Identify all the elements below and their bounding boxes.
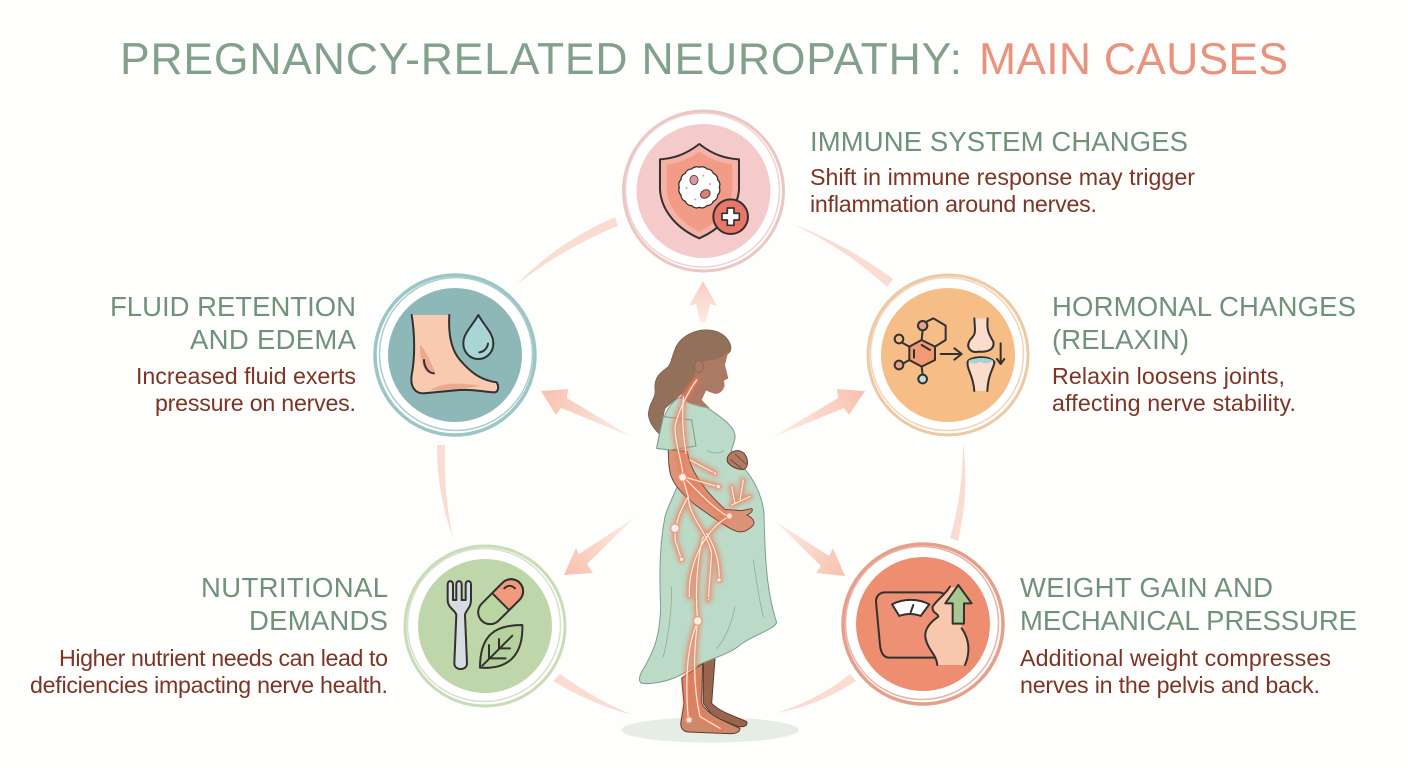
icon: molecule and joint (868, 275, 1028, 435)
icon: fork, capsule and leaf (405, 546, 565, 706)
arrow: to fluid retention (541, 389, 632, 437)
heading: nutritional demands: NUTRITIONAL (201, 572, 388, 603)
icon: scale and belly (843, 544, 1003, 704)
heading: immune system changes: IMMUNE SYSTEM CHANGES (810, 126, 1188, 157)
heading: fluid retention and edema: AND EDEMA (190, 324, 357, 355)
back leg (703, 658, 747, 727)
panel: hormonal changes (868, 275, 1356, 435)
dress folds (663, 451, 763, 657)
nerve glow (675, 380, 750, 728)
description: nutritional demands: deficiencies impacting nerve health. (30, 672, 388, 698)
ear (695, 361, 703, 373)
icon: immune circle (624, 111, 784, 271)
description: weight gain: nerves in the pelvis and back. (1020, 672, 1320, 698)
heading: hormonal changes: HORMONAL CHANGES (1052, 291, 1356, 322)
arrow: to immune system (689, 281, 717, 322)
heading: nutritional demands: DEMANDS (249, 605, 388, 636)
panel: nutritional demands (30, 546, 565, 706)
dress (640, 397, 777, 684)
hair (648, 330, 731, 434)
nerve halo (675, 380, 750, 728)
nerve lines (675, 380, 750, 728)
description: weight gain: Additional weight compresses (1020, 645, 1331, 671)
front leg (681, 663, 740, 734)
arrow: to nutritional demands (564, 518, 634, 575)
heading: weight gain: WEIGHT GAIN AND (1020, 572, 1273, 603)
title: PREGNANCY-RELATED NEUROPATHY: (120, 35, 962, 84)
panel: weight gain and mechanical pressure (843, 544, 1357, 704)
description: fluid retention: Increased fluid exerts (136, 363, 356, 389)
upper hand (727, 451, 747, 469)
title: MAIN CAUSES (979, 35, 1288, 84)
head and neck (678, 352, 728, 408)
icon: foot and water drop (375, 275, 535, 435)
arrow: to hormonal changes (773, 389, 865, 437)
ground shadow (621, 717, 799, 743)
sleeve (657, 417, 696, 450)
nerve nodes (671, 472, 732, 723)
description: immune system changes: Shift in immune response may trigger (810, 164, 1195, 190)
panel: fluid retention and edema (110, 275, 535, 435)
panel: immune system changes (624, 111, 1195, 271)
description: immune system changes: inflammation around nerves. (810, 191, 1097, 217)
arm (668, 449, 754, 532)
arrow: to weight gain (775, 521, 845, 576)
heading: fluid retention and edema: FLUID RETENTION (110, 291, 356, 322)
illustration: pregnant woman with nerve pathways (621, 330, 799, 743)
description: nutritional demands: Higher nutrient needs can lead to (59, 645, 388, 671)
heading: hormonal changes: (RELAXIN) (1052, 324, 1189, 355)
description: fluid retention: pressure on nerves. (155, 390, 356, 416)
description: hormonal changes: Relaxin loosens joints, (1052, 363, 1285, 389)
connecting arcs (437, 217, 965, 715)
heading: weight gain: MECHANICAL PRESSURE (1020, 605, 1357, 636)
description: hormonal changes: affecting nerve stability. (1052, 390, 1296, 416)
